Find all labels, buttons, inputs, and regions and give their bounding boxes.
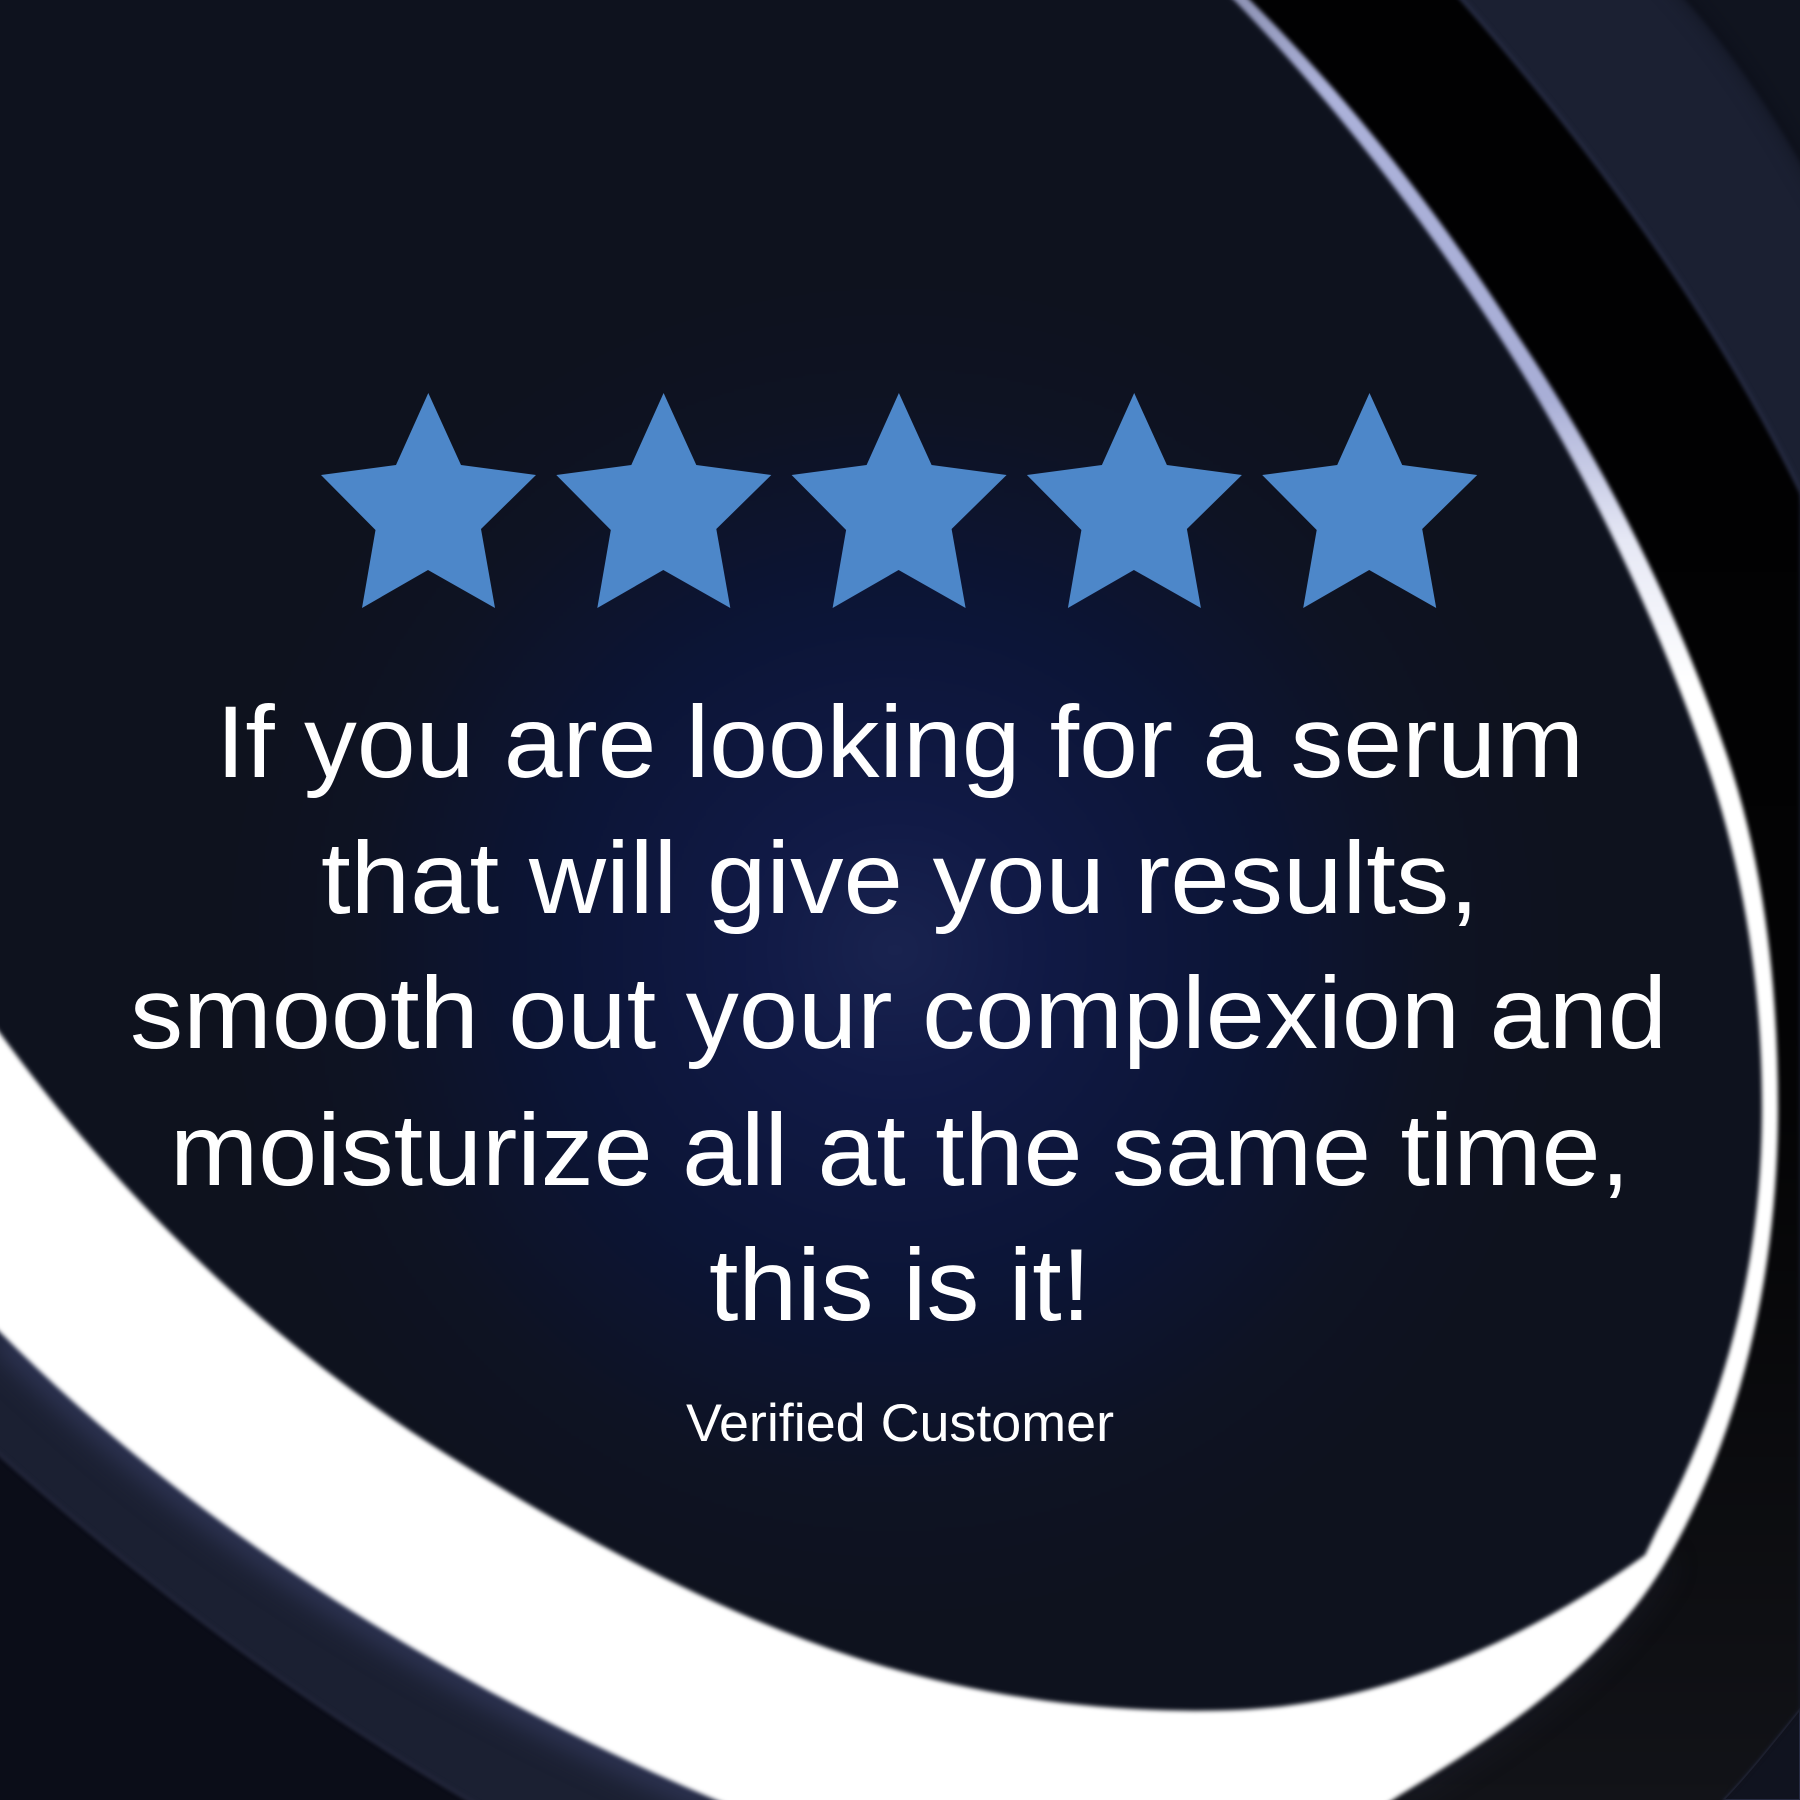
black ring shadow xyxy=(900,0,1800,1800)
quote line 3: smooth out your complexion and xyxy=(130,956,1667,1070)
star 2 xyxy=(556,393,771,608)
five star rating xyxy=(321,393,1477,608)
quote line 4: moisturize all at the same time, xyxy=(170,1093,1630,1207)
quote line 1: If you are looking for a serum xyxy=(216,685,1584,799)
star 3 xyxy=(792,393,1007,608)
far corner top right xyxy=(1650,0,1800,260)
quote line 2: that will give you results, xyxy=(321,821,1479,935)
quote line 5: this is it! xyxy=(709,1228,1091,1342)
attribution: Verified Customer xyxy=(686,1394,1114,1453)
star 1 xyxy=(321,393,536,608)
review quote xyxy=(130,685,1667,1342)
ring glow on lower band xyxy=(0,1332,1667,1800)
star 5 xyxy=(1262,393,1477,608)
star 4 xyxy=(1027,393,1242,608)
